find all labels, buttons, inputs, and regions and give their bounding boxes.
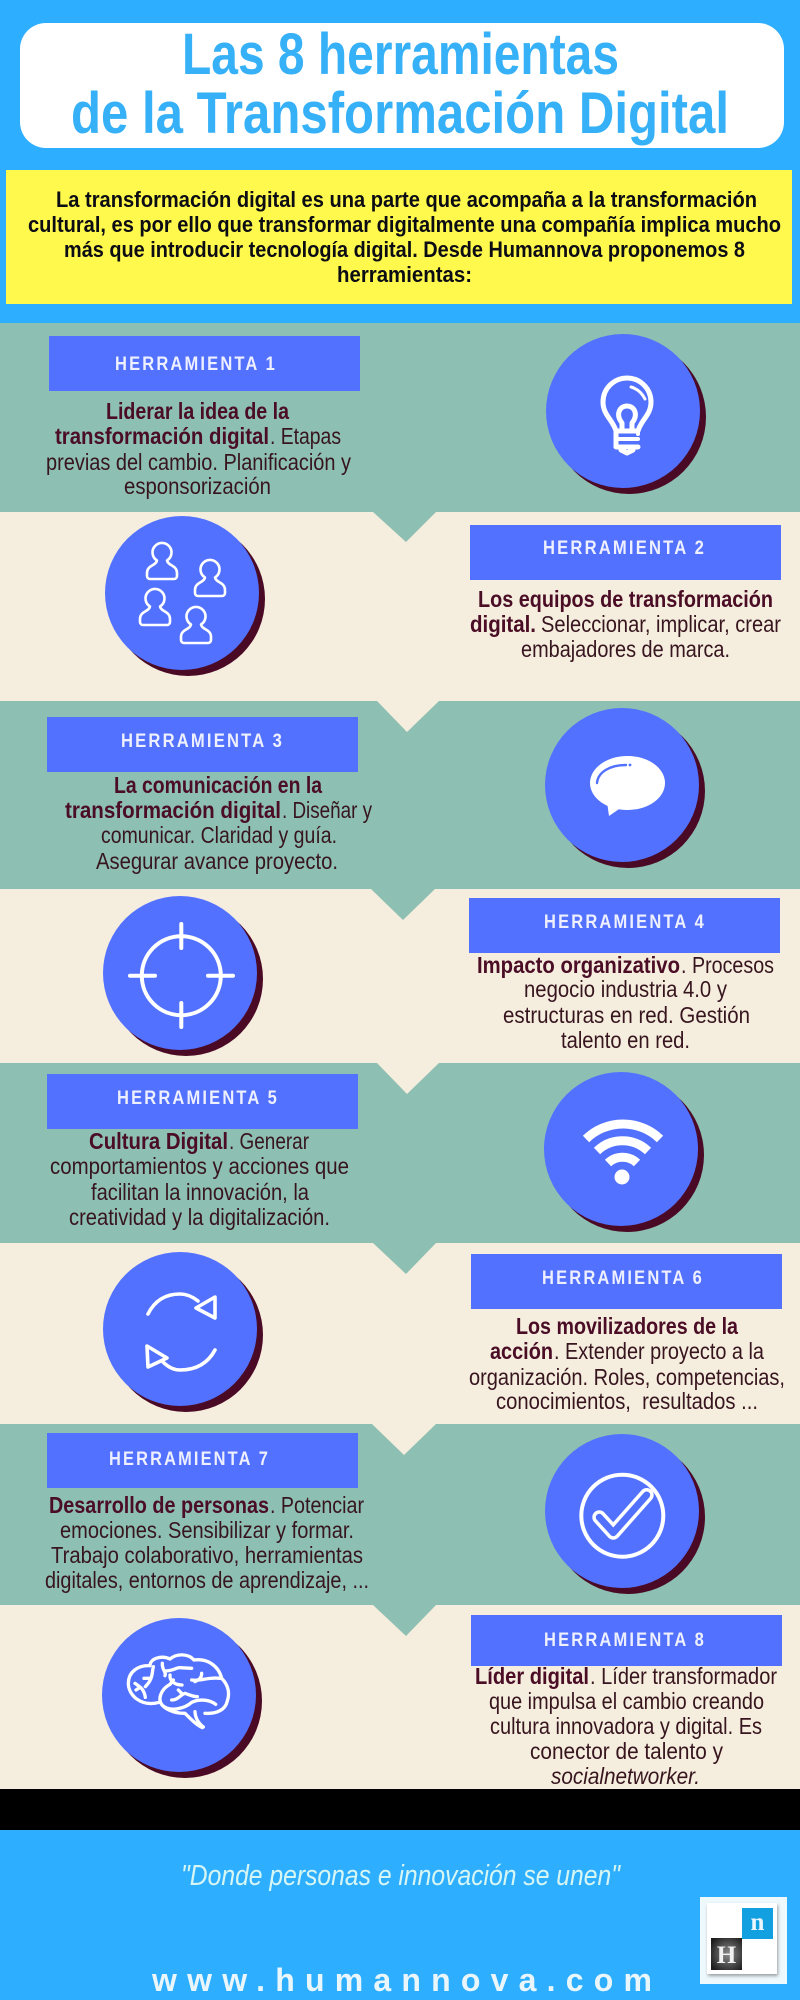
text: herramienta 5: . Generar	[229, 1128, 309, 1154]
heading bar: herramienta 8	[471, 1615, 782, 1666]
heading bar: herramienta 1: HERRAMIENTA 1	[115, 354, 277, 375]
text: herramienta 4	[477, 952, 774, 1053]
text: herramienta 2	[470, 586, 781, 662]
heading bar: herramienta 7	[47, 1433, 358, 1488]
text: herramienta 5: creatividad y la digitalización.	[69, 1204, 330, 1230]
panel: footer	[0, 1830, 800, 2000]
tagline: "Donde personas e innovación se unen"	[181, 1860, 621, 1892]
heading bar: herramienta 7: HERRAMIENTA 7	[109, 1449, 270, 1470]
text: herramienta 6: Los movilizadores de la	[516, 1313, 738, 1339]
panel: herramienta 6	[0, 1243, 800, 1424]
panel: herramienta 7	[0, 1424, 800, 1605]
text: herramienta 4: talento en red.	[561, 1027, 690, 1053]
text: herramienta 7	[45, 1492, 369, 1593]
icon: team of people	[105, 516, 265, 676]
text: herramienta 1: previas del cambio. Planificación y	[46, 449, 351, 475]
text: herramienta 8: cultura innovadora y digital. Es	[490, 1713, 762, 1739]
icon: check mark	[545, 1434, 705, 1594]
panel: herramienta 1	[0, 323, 800, 512]
text: herramienta 4: negocio industria 4.0 y	[524, 976, 727, 1002]
icon: target crosshair	[103, 896, 263, 1056]
text: herramienta 4: . Procesos	[681, 952, 774, 978]
text: herramienta 8: conector de talento y	[530, 1738, 723, 1764]
arrow: green pointer	[373, 1605, 436, 1636]
black band	[0, 1789, 800, 1830]
intro text box	[6, 170, 792, 304]
text: herramienta 5: comportamientos y acciones que	[50, 1153, 349, 1179]
text: herramienta 4: Impacto organizativo	[477, 952, 680, 978]
heading bar: herramienta 3: HERRAMIENTA 3	[121, 731, 284, 752]
title: Las 8 herramientas	[182, 22, 619, 87]
text: herramienta 8: . Líder transformador	[590, 1663, 777, 1689]
text: herramienta 2: digital.	[470, 611, 536, 637]
intro text box: herramientas:	[337, 262, 472, 287]
website url: www.humannova.com	[151, 1962, 652, 1998]
title panel	[20, 22, 784, 148]
text: herramienta 8	[475, 1663, 777, 1789]
text: herramienta 8: Líder digital	[475, 1663, 589, 1689]
text: herramienta 5: facilitan la innovación, la	[91, 1179, 309, 1205]
arrow: beige pointer	[372, 1424, 436, 1455]
icon: light bulb	[546, 334, 706, 494]
text: herramienta 7: . Potenciar	[270, 1492, 364, 1518]
text: herramienta 5	[50, 1128, 349, 1230]
heading bar: herramienta 1	[49, 336, 360, 391]
text: herramienta 1: Liderar la idea de la	[106, 398, 289, 424]
text: herramienta 1: . Etapas	[270, 423, 341, 449]
text: herramienta 1: esponsorización	[124, 473, 271, 499]
text: herramienta 3: comunicar. Claridad y guía.	[101, 822, 337, 848]
heading bar: herramienta 4: HERRAMIENTA 4	[544, 912, 706, 933]
text: herramienta 7: Trabajo colaborativo, herramientas	[51, 1542, 363, 1568]
title	[71, 22, 729, 146]
arrow: beige pointer	[377, 701, 439, 732]
heading bar: herramienta 3	[47, 717, 358, 772]
icon: wifi	[544, 1072, 704, 1232]
icon: sync arrows	[103, 1252, 263, 1412]
text: herramienta 7: emociones. Sensibilizar y formar.	[60, 1517, 354, 1543]
text: herramienta 4: estructuras en red. Gestión	[503, 1002, 750, 1028]
text: herramienta 6: . Extender proyecto a la	[554, 1338, 764, 1364]
text: herramienta 6: acción	[490, 1338, 553, 1364]
panel: herramienta 8	[0, 1605, 800, 1789]
text: herramienta 8: socialnetworker.	[551, 1763, 700, 1789]
arrow: beige pointer	[377, 1063, 439, 1094]
heading bar: herramienta 6: HERRAMIENTA 6	[542, 1268, 704, 1289]
heading bar: herramienta 5	[47, 1074, 358, 1129]
icon: brain	[102, 1618, 262, 1778]
panel: herramienta 3	[0, 701, 800, 889]
heading bar: herramienta 2	[470, 525, 781, 580]
heading bar: herramienta 2: HERRAMIENTA 2	[543, 538, 706, 559]
logo: Humannova	[700, 1897, 787, 1984]
icon: speech bubble	[545, 708, 705, 868]
text: herramienta 1	[46, 398, 351, 499]
text: herramienta 1: transformación digital	[55, 423, 269, 449]
text: herramienta 8: que impulsa el cambio creando	[489, 1688, 764, 1714]
panel: herramienta 4	[0, 889, 800, 1063]
arrow: green pointer	[371, 889, 435, 920]
logo: Humannova: n	[751, 1909, 765, 1936]
heading bar: herramienta 6	[471, 1254, 782, 1309]
text: herramienta 3: La comunicación en la	[114, 772, 322, 798]
text: herramienta 2: embajadores de marca.	[521, 636, 730, 662]
arrow: green pointer	[373, 1243, 436, 1274]
text: herramienta 5: Cultura Digital	[89, 1128, 228, 1154]
panel: herramienta 2	[0, 512, 800, 701]
text: herramienta 3: Asegurar avance proyecto.	[96, 848, 338, 874]
arrow: green pointer	[373, 512, 436, 542]
heading bar: herramienta 5: HERRAMIENTA 5	[117, 1088, 279, 1109]
logo: Humannova: H	[717, 1942, 737, 1969]
text: herramienta 3: transformación digital	[65, 797, 281, 823]
heading bar: herramienta 4	[469, 898, 780, 953]
text: herramienta 3: . Diseñar y	[282, 797, 372, 823]
heading bar: herramienta 8: HERRAMIENTA 8	[544, 1630, 706, 1651]
panel: herramienta 5	[0, 1063, 800, 1243]
text: herramienta 6	[469, 1313, 785, 1414]
text: herramienta 6: conocimientos, resultados ...	[496, 1388, 758, 1414]
text: herramienta 7: digitales, entornos de aprendizaje, ...	[45, 1567, 369, 1593]
text: herramienta 7: Desarrollo de personas	[49, 1492, 269, 1518]
text: herramienta 3	[65, 772, 372, 874]
